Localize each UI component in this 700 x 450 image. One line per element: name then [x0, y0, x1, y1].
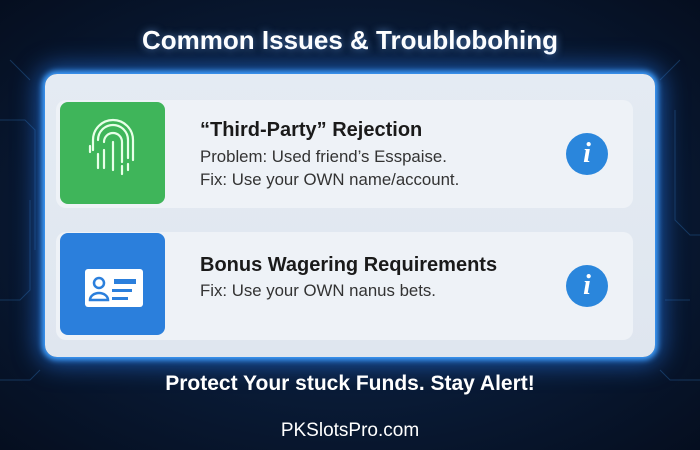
row: bonus wagering [56, 232, 633, 340]
icon: info [566, 265, 608, 307]
icon: fingerprint [60, 102, 165, 204]
icon: info: i [583, 138, 591, 169]
icon: id card [60, 233, 165, 335]
url: PKSlotsPro.com [281, 420, 419, 441]
heading: Bonus Wagering Requirements [200, 254, 497, 276]
text: fix: Fix: Use your OWN nanus bets. [200, 281, 436, 300]
heading: “Third-Party” Rejection [200, 119, 422, 141]
row: third-party rejection [56, 100, 633, 208]
icon: info [566, 133, 608, 175]
footer message: Protect Your stuck Funds. Stay Alert! [165, 372, 535, 395]
title: Common Issues & Troublobohing [142, 25, 558, 55]
text: fix: Fix: Use your OWN name/account. [200, 170, 459, 189]
icon: info: i [583, 270, 591, 301]
text: problem: Problem: Used friend’s Esspaise. [200, 147, 447, 166]
panel: issues [45, 74, 655, 357]
